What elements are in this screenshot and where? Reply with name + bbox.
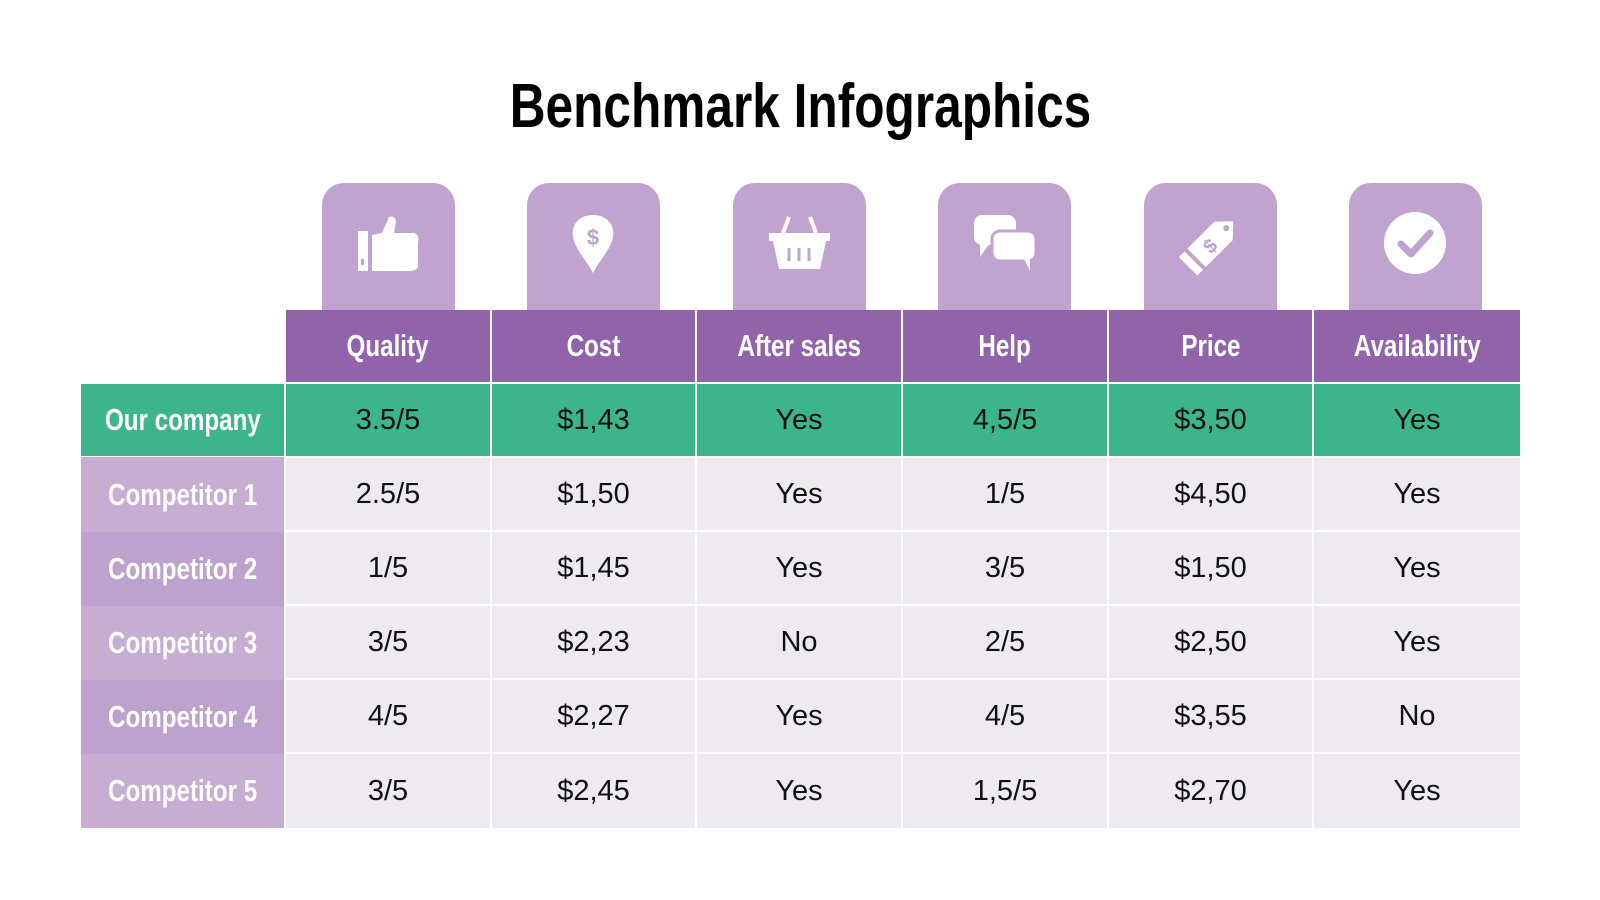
table: $2,45 — [557, 774, 630, 806]
table: Yes — [1393, 478, 1441, 510]
row: competitor 3 — [81, 606, 1520, 680]
table: $3,50 — [1174, 404, 1247, 436]
table: Yes — [1393, 626, 1441, 658]
table: $4,50 — [1174, 478, 1247, 510]
table: Competitor 5 — [108, 773, 257, 808]
table: Yes — [775, 404, 823, 436]
table: Yes — [775, 774, 823, 806]
table: Yes — [775, 700, 823, 732]
table: 3/5 — [985, 552, 1025, 584]
table: 2.5/5 — [356, 478, 420, 510]
table: Competitor 3 — [108, 625, 257, 660]
table: $3,55 — [1174, 700, 1247, 732]
table: 4,5/5 — [973, 404, 1037, 436]
table: Competitor 1 — [108, 476, 257, 512]
table: After sales — [737, 328, 861, 363]
table: $1,43 — [557, 404, 630, 436]
icon: price tag — [1144, 183, 1277, 310]
icon: price tag: $ — [1199, 235, 1222, 258]
table: No — [780, 626, 818, 658]
table: $2,50 — [1174, 626, 1247, 658]
table: Competitor 4 — [108, 699, 257, 734]
table: 2/5 — [985, 626, 1025, 658]
table: $1,50 — [557, 478, 630, 510]
table: 3.5/5 — [356, 404, 420, 436]
table: Cost — [567, 328, 620, 363]
row: competitor 5 — [81, 754, 1520, 828]
table: $1,45 — [557, 552, 630, 584]
table: Yes — [1393, 404, 1441, 436]
icon tabs — [322, 183, 1482, 310]
row: competitor 1 — [81, 457, 1520, 532]
table: Price — [1181, 328, 1240, 363]
table: Yes — [1393, 774, 1441, 806]
table: Competitor 2 — [108, 551, 257, 586]
title: Benchmark Infographics — [509, 72, 1091, 140]
table: Yes — [775, 552, 823, 584]
table: 3/5 — [368, 774, 408, 806]
icon: check circle — [1349, 183, 1482, 310]
table: Yes — [775, 478, 823, 510]
table: Quality — [347, 328, 429, 363]
icon: thumbs up — [322, 183, 455, 310]
row: competitor 2 — [81, 532, 1520, 606]
table: Our company — [105, 402, 260, 437]
table: No — [1398, 700, 1436, 732]
table: Availability — [1354, 328, 1480, 363]
icon: basket — [733, 183, 866, 310]
header row — [286, 310, 1520, 382]
icon: chat bubbles — [938, 183, 1071, 310]
table: Yes — [1393, 552, 1441, 584]
table: $2,70 — [1174, 774, 1247, 806]
table: $2,23 — [557, 626, 630, 658]
table: 4/5 — [985, 700, 1025, 732]
icon: location dollar — [527, 183, 660, 310]
table: 1/5 — [985, 478, 1025, 510]
row: competitor 4 — [81, 680, 1520, 754]
table: 3/5 — [368, 626, 408, 658]
table: 1/5 — [368, 552, 408, 584]
table: Help — [979, 328, 1031, 363]
table: $1,50 — [1174, 552, 1247, 584]
icon: location dollar: $ — [587, 225, 599, 250]
table: 4/5 — [368, 700, 408, 732]
table: $2,27 — [557, 700, 630, 732]
table: 1,5/5 — [973, 774, 1037, 806]
row: our company — [81, 384, 1520, 456]
